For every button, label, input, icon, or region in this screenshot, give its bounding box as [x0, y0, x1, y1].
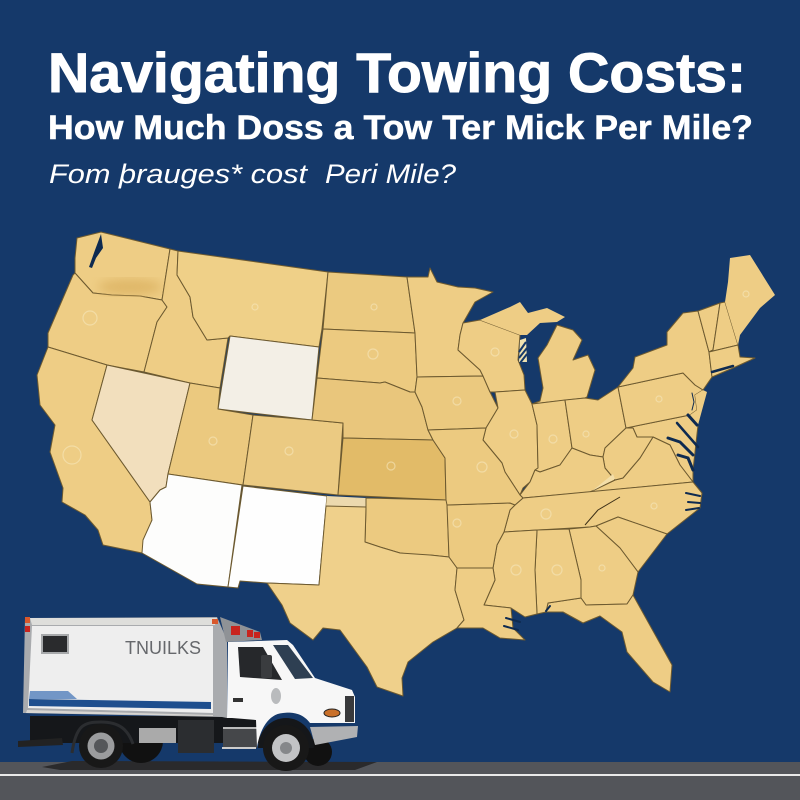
- state: Michigan upper: [480, 302, 565, 335]
- state: New Hampshire: [709, 302, 738, 352]
- shading on Washington: [98, 279, 162, 295]
- rear wheel: [79, 724, 123, 768]
- state: Montana: [177, 251, 328, 347]
- box lettering: TNUILKS: [125, 638, 201, 658]
- Green Bay stripes: [519, 342, 527, 363]
- state: Texas: [267, 506, 464, 696]
- subtitle: How Much Doss a Tow Ter Mick Per Mile?: [48, 109, 753, 147]
- state: Kansas: [338, 438, 446, 500]
- state: Tennessee and North Carolina: [504, 482, 702, 534]
- truck shadow: [42, 761, 377, 770]
- side window: [238, 647, 282, 680]
- state: Oregon: [48, 273, 167, 372]
- road: [0, 761, 800, 800]
- box panel: [28, 626, 213, 713]
- Tennessee / North Carolina border: [585, 497, 620, 525]
- state: Pennsylvania: [618, 373, 703, 428]
- state: South Dakota: [317, 329, 417, 392]
- state: Kentucky: [520, 448, 615, 498]
- state: Georgia: [569, 526, 638, 605]
- state: Virginia: [590, 437, 693, 492]
- tagline: Fom þrauges* cost: [49, 159, 309, 189]
- box window: [42, 635, 68, 653]
- state: Minnesota: [407, 268, 493, 377]
- mirror: [261, 655, 272, 678]
- door oval: [271, 688, 281, 704]
- state: Mississippi: [484, 530, 537, 617]
- state: Wisconsin: [458, 320, 525, 392]
- rear dual wheel: [119, 719, 163, 763]
- state: Maryland and Delaware: [626, 415, 698, 482]
- tagline: [49, 159, 456, 189]
- state: South Carolina: [596, 517, 667, 572]
- map markers: [63, 291, 749, 575]
- state: Wyoming: [218, 336, 319, 420]
- state: Michigan lower: [532, 325, 595, 404]
- state: Iowa: [415, 376, 498, 430]
- chassis: [30, 716, 260, 743]
- state: Nebraska: [312, 378, 433, 440]
- state: Florida: [546, 595, 672, 692]
- water: Chesapeake Bay and sounds: [504, 366, 733, 630]
- front bumper: [310, 726, 358, 745]
- state: Maine: [725, 255, 775, 345]
- state: Ohio: [565, 387, 626, 457]
- state: North Dakota: [323, 272, 415, 333]
- state: Arizona: [142, 474, 242, 587]
- blue stripe: [29, 699, 211, 709]
- state: Alabama: [535, 529, 581, 614]
- state: California: [37, 347, 152, 553]
- headlamp: [324, 709, 340, 717]
- state: New Jersey: [690, 390, 707, 425]
- state: Massachusetts and Connecticut: [709, 345, 755, 377]
- light blue stripe: [29, 691, 77, 699]
- side tank: [139, 728, 176, 743]
- roof lights: [25, 617, 260, 638]
- state: Oklahoma: [365, 498, 449, 557]
- Virginia tail: [592, 474, 615, 491]
- tagline: Peri Mile?: [325, 159, 456, 189]
- state: Washington: [75, 232, 170, 300]
- map: United States: [37, 232, 775, 696]
- state: Arkansas: [447, 503, 515, 568]
- state: Utah: [168, 383, 253, 485]
- state: Indiana: [532, 400, 572, 472]
- battery box: [178, 720, 214, 753]
- truck: [18, 617, 358, 771]
- state: New Mexico: [228, 486, 327, 588]
- road line: [0, 774, 800, 776]
- state: Vermont: [698, 303, 720, 352]
- Green Bay: [519, 338, 527, 362]
- door handle: [233, 698, 243, 702]
- state: Oklahoma panhandle: [326, 496, 366, 507]
- windshield: [273, 645, 313, 679]
- cargo box: [23, 617, 227, 718]
- state: West Virginia: [603, 428, 653, 480]
- state: Missouri: [428, 428, 523, 505]
- wheel arch: [258, 718, 314, 748]
- state: Idaho: [144, 249, 228, 388]
- box bottom rail: [26, 710, 213, 716]
- water: Puget Sound: [89, 234, 103, 268]
- state: Colorado: [243, 415, 343, 495]
- box slope: [220, 617, 262, 642]
- title: Navigating Towing Costs:: [48, 41, 746, 104]
- cab: [227, 640, 355, 747]
- front wheel: [263, 725, 309, 771]
- rear bumper: [18, 738, 63, 747]
- state: New York: [618, 311, 712, 390]
- state: Nevada: [92, 365, 190, 502]
- cab step: [223, 728, 257, 748]
- state: Louisiana: [455, 568, 525, 640]
- state: Illinois: [483, 390, 538, 495]
- box roof: [30, 618, 217, 625]
- front dual wheel: [304, 738, 332, 766]
- grille: [345, 696, 354, 722]
- rear fender: [72, 722, 133, 753]
